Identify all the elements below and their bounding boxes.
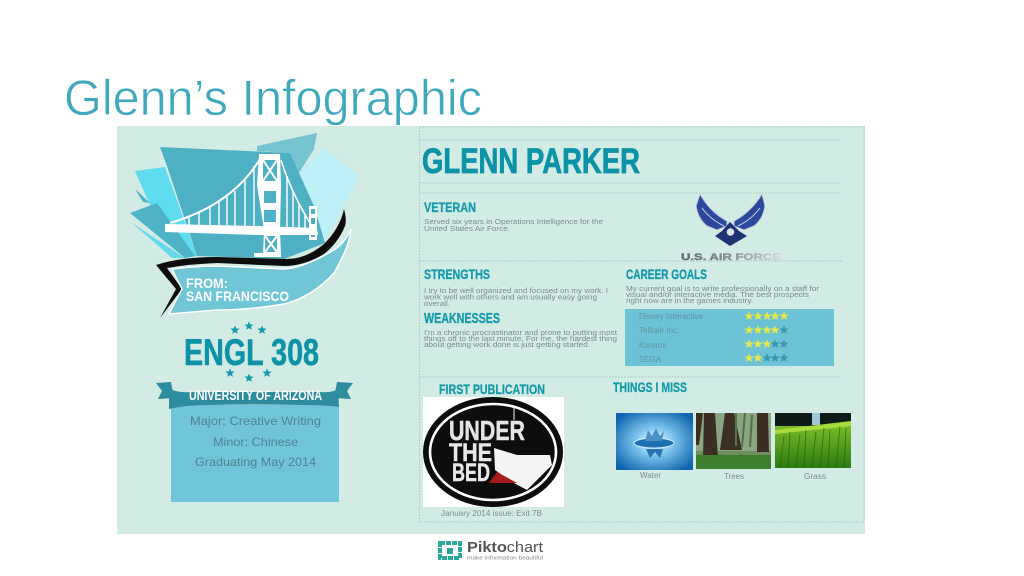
image: trees	[696, 413, 771, 469]
icon: US Air Force logo	[681, 194, 781, 263]
panel: right column content	[422, 142, 851, 518]
section: strengths: work well with others and am usually easy going	[423, 292, 597, 302]
info box: major and minor: Graduating May 2014	[195, 455, 316, 469]
section: veteran	[424, 199, 603, 233]
logo: Piktochart: Piktochart	[467, 539, 544, 556]
logo: Piktochart: make information beautiful	[467, 556, 543, 562]
section: career goals: CAREER GOALS	[626, 266, 707, 282]
ribbon: University of Arizona: UNIVERSITY OF ARIZONA	[189, 387, 322, 403]
section: weaknesses: things off to the last minute. For me, the hardest thing	[424, 334, 617, 343]
panel: right content frame	[420, 127, 864, 522]
section: career goals: right now are in the games industry.	[626, 296, 753, 305]
course heading with stars	[184, 321, 319, 382]
rating table: studios: Telltale Inc.	[639, 326, 679, 335]
section: career goals	[626, 266, 820, 305]
info box: major and minor: Minor: Chinese	[213, 435, 298, 449]
image: grass	[775, 413, 851, 468]
section: first publication: January 2014 issue: Exit 7B	[441, 509, 542, 518]
section: veteran: VETERAN	[424, 199, 476, 215]
section: weaknesses: about getting work done is just getting started.	[424, 340, 590, 349]
image: Under the Bed logo	[423, 397, 564, 507]
section: first publication	[423, 381, 564, 518]
panel: infographic background	[117, 126, 865, 534]
image: Under the Bed logo: UNDER	[449, 415, 525, 446]
image: Under the Bed logo: BED	[452, 459, 490, 487]
section: first publication: FIRST PUBLICATION	[439, 381, 545, 397]
icon: Piktochart mark	[440, 543, 460, 558]
section: things I miss: Grass	[804, 472, 826, 481]
section: things I miss: Trees	[724, 472, 744, 481]
title: Glenn’s Infographic	[64, 70, 482, 126]
info box: major and minor	[171, 405, 339, 502]
course heading with stars: ENGL 308	[184, 332, 319, 373]
banner text	[186, 275, 289, 304]
section: things I miss	[613, 379, 851, 481]
bridge	[165, 154, 318, 257]
rating table: studios: Konami	[639, 341, 666, 350]
ribbon: University of Arizona	[156, 382, 353, 409]
name heading: GLENN PARKER	[422, 142, 640, 181]
rating table: studios: SEGA	[639, 355, 662, 364]
icon: US Air Force logo: U.S. AIR FORCE	[681, 252, 781, 263]
banner: From San Francisco	[156, 209, 351, 318]
section: weaknesses: I'm a chronic procrastinator and prone to putting most	[424, 328, 618, 337]
banner text: FROM:	[186, 275, 228, 291]
section: weaknesses: WEAKNESSES	[424, 310, 500, 327]
banner text: SAN FRANCISCO	[186, 288, 289, 304]
section: career goals: visual and/or interactive media. The best prospects	[626, 290, 809, 299]
star ratings	[744, 311, 789, 362]
section: weaknesses	[424, 310, 618, 349]
section: things I miss: THINGS I MISS	[613, 379, 687, 395]
section: veteran: Served six years in Operations Intelligence for the	[424, 217, 603, 226]
section: things I miss: Water	[640, 471, 661, 480]
info box: major and minor: Major: Creative Writing	[190, 414, 321, 428]
rating table: studios	[625, 309, 834, 366]
section: strengths	[423, 266, 608, 308]
icon: Golden Gate bridge emblem	[130, 133, 360, 259]
section: strengths: I try to be well organized and focused on my work. I	[424, 286, 608, 295]
rating table: studios: Disney Interactive	[639, 312, 704, 321]
image: water	[616, 413, 693, 470]
section: veteran: United States Air Force.	[424, 224, 510, 233]
panel: left column	[130, 133, 360, 502]
section: strengths: STRENGTHS	[424, 266, 490, 282]
logo: Piktochart	[440, 539, 544, 562]
section: career goals: My current goal is to write professionally on a staff for	[626, 284, 820, 293]
section: strengths: overall.	[424, 299, 450, 308]
image: Under the Bed logo: THE	[449, 439, 492, 467]
